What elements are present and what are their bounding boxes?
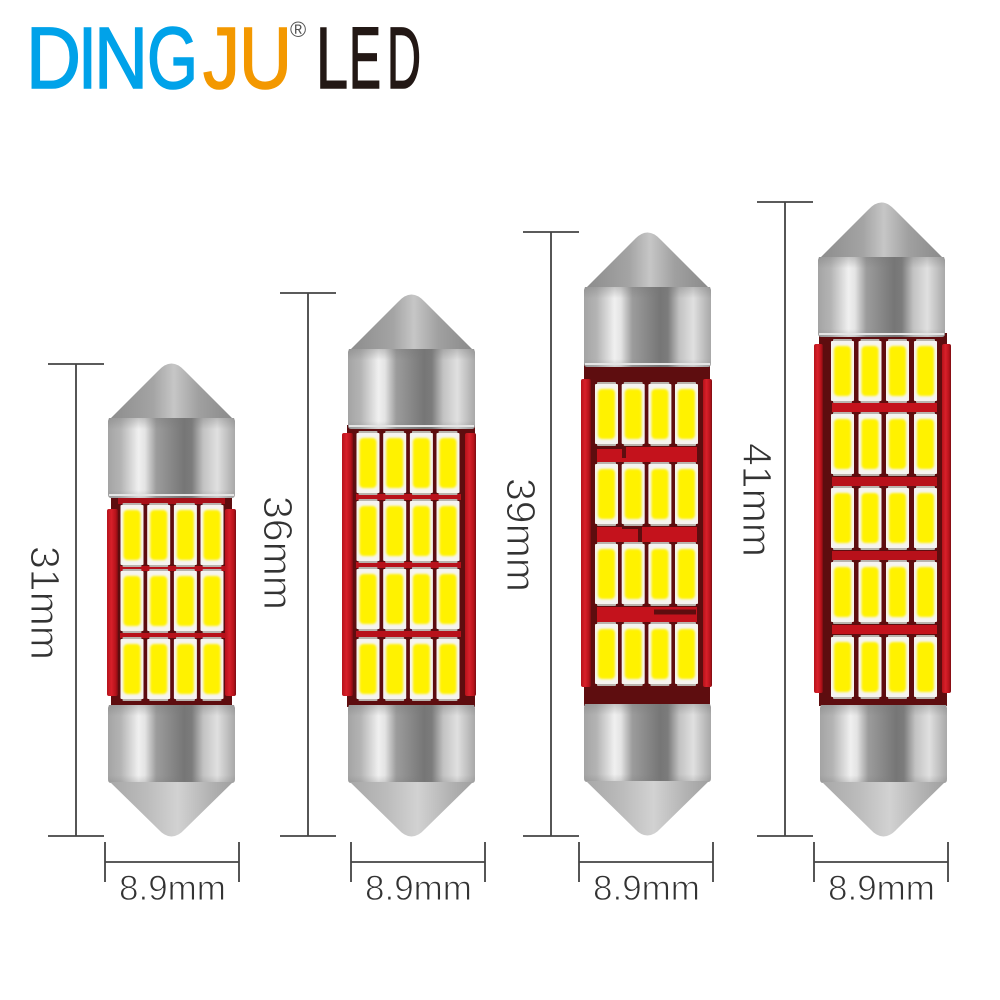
height dimension 39mm: 39mm [498, 478, 544, 592]
logo: DINGJU LED: U [239, 10, 292, 107]
logo: DINGJU LED: N [94, 10, 148, 107]
height dimension 41mm [734, 202, 813, 836]
width dimension bulb 4 [814, 842, 948, 908]
width dimension bulb 1 [105, 842, 239, 908]
height dimension 31mm: 31mm [22, 546, 68, 660]
height dimension 36mm: 36mm [255, 496, 301, 610]
width dimension bulb 2 [351, 842, 485, 908]
logo: DINGJU LED: ® [290, 17, 306, 42]
bulb 1: 31mm [107, 364, 236, 836]
height dimension 39mm [498, 232, 579, 836]
logo: DINGJU LED: J [203, 10, 240, 107]
height dimension 36mm [255, 293, 336, 836]
logo: DINGJU LED: E [349, 10, 381, 107]
width dimension bulb 3 [579, 842, 713, 908]
width dimension bulb 2: 8.9mm [365, 869, 472, 908]
logo: DINGJU LED: G [147, 10, 198, 107]
logo: DINGJU LED [26, 10, 421, 107]
height dimension 31mm [22, 364, 104, 836]
logo: DINGJU LED: I [78, 10, 97, 107]
width dimension bulb 3: 8.9mm [593, 869, 700, 908]
logo: DINGJU LED: D [387, 10, 421, 107]
height dimension 41mm: 41mm [734, 443, 780, 557]
bulb 4: 41mm [814, 202, 951, 836]
logo: DINGJU LED: D [26, 10, 81, 107]
bulb 2: 36mm [342, 294, 476, 836]
bulb 3: 39mm [581, 232, 712, 836]
logo: DINGJU LED: L [316, 10, 348, 107]
width dimension bulb 1: 8.9mm [119, 869, 226, 908]
width dimension bulb 4: 8.9mm [828, 869, 935, 908]
